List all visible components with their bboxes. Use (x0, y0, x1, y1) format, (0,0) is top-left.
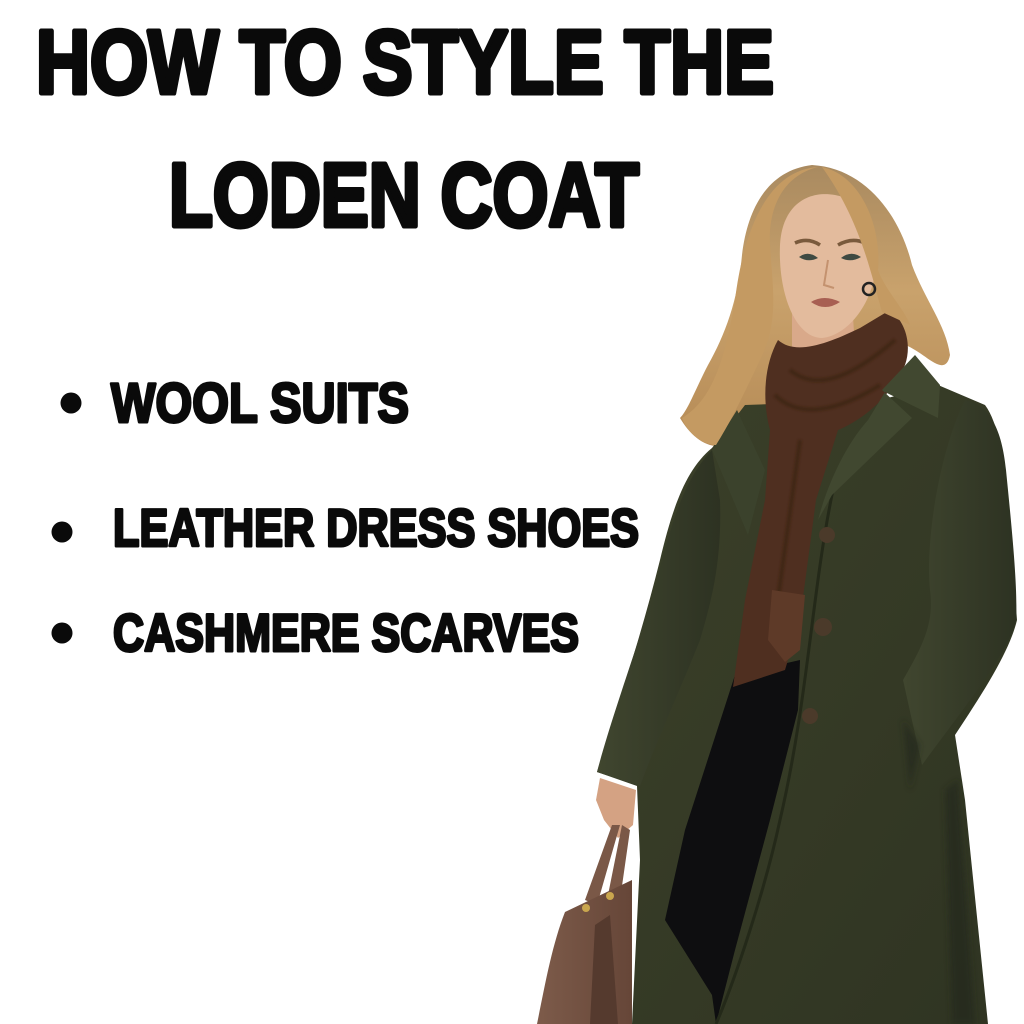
title: HOW TO STYLE THE (36, 13, 774, 113)
neck (792, 300, 856, 375)
item: leather dress shoes: LEATHER DRESS SHOES (113, 499, 639, 558)
illustration: woman in loden coat (537, 165, 1017, 1024)
item: cashmere scarves: CASHMERE SCARVES (113, 604, 579, 663)
handbag (537, 825, 632, 1024)
hair front strands (682, 167, 910, 445)
eyebrows (795, 240, 865, 245)
lips (811, 298, 840, 307)
earring (863, 283, 875, 295)
pocket opening and coat folds (903, 720, 975, 1024)
item: wool suits: WOOL SUITS (111, 371, 409, 434)
nose (824, 260, 834, 288)
left sleeve (597, 450, 720, 786)
right lapel and collar (818, 355, 940, 520)
scarf (733, 310, 908, 687)
eyes (799, 254, 861, 260)
title (36, 13, 774, 246)
left lapel (712, 410, 765, 535)
hair back (680, 165, 950, 446)
hand (596, 778, 636, 838)
trousers (665, 660, 800, 1024)
title: LODEN COAT (169, 146, 639, 246)
face (780, 194, 876, 338)
right sleeve (903, 400, 1016, 765)
buttons (802, 527, 835, 724)
front placket (716, 490, 833, 1024)
list of styling items (52, 371, 639, 663)
coat base silhouette (597, 385, 1017, 1024)
